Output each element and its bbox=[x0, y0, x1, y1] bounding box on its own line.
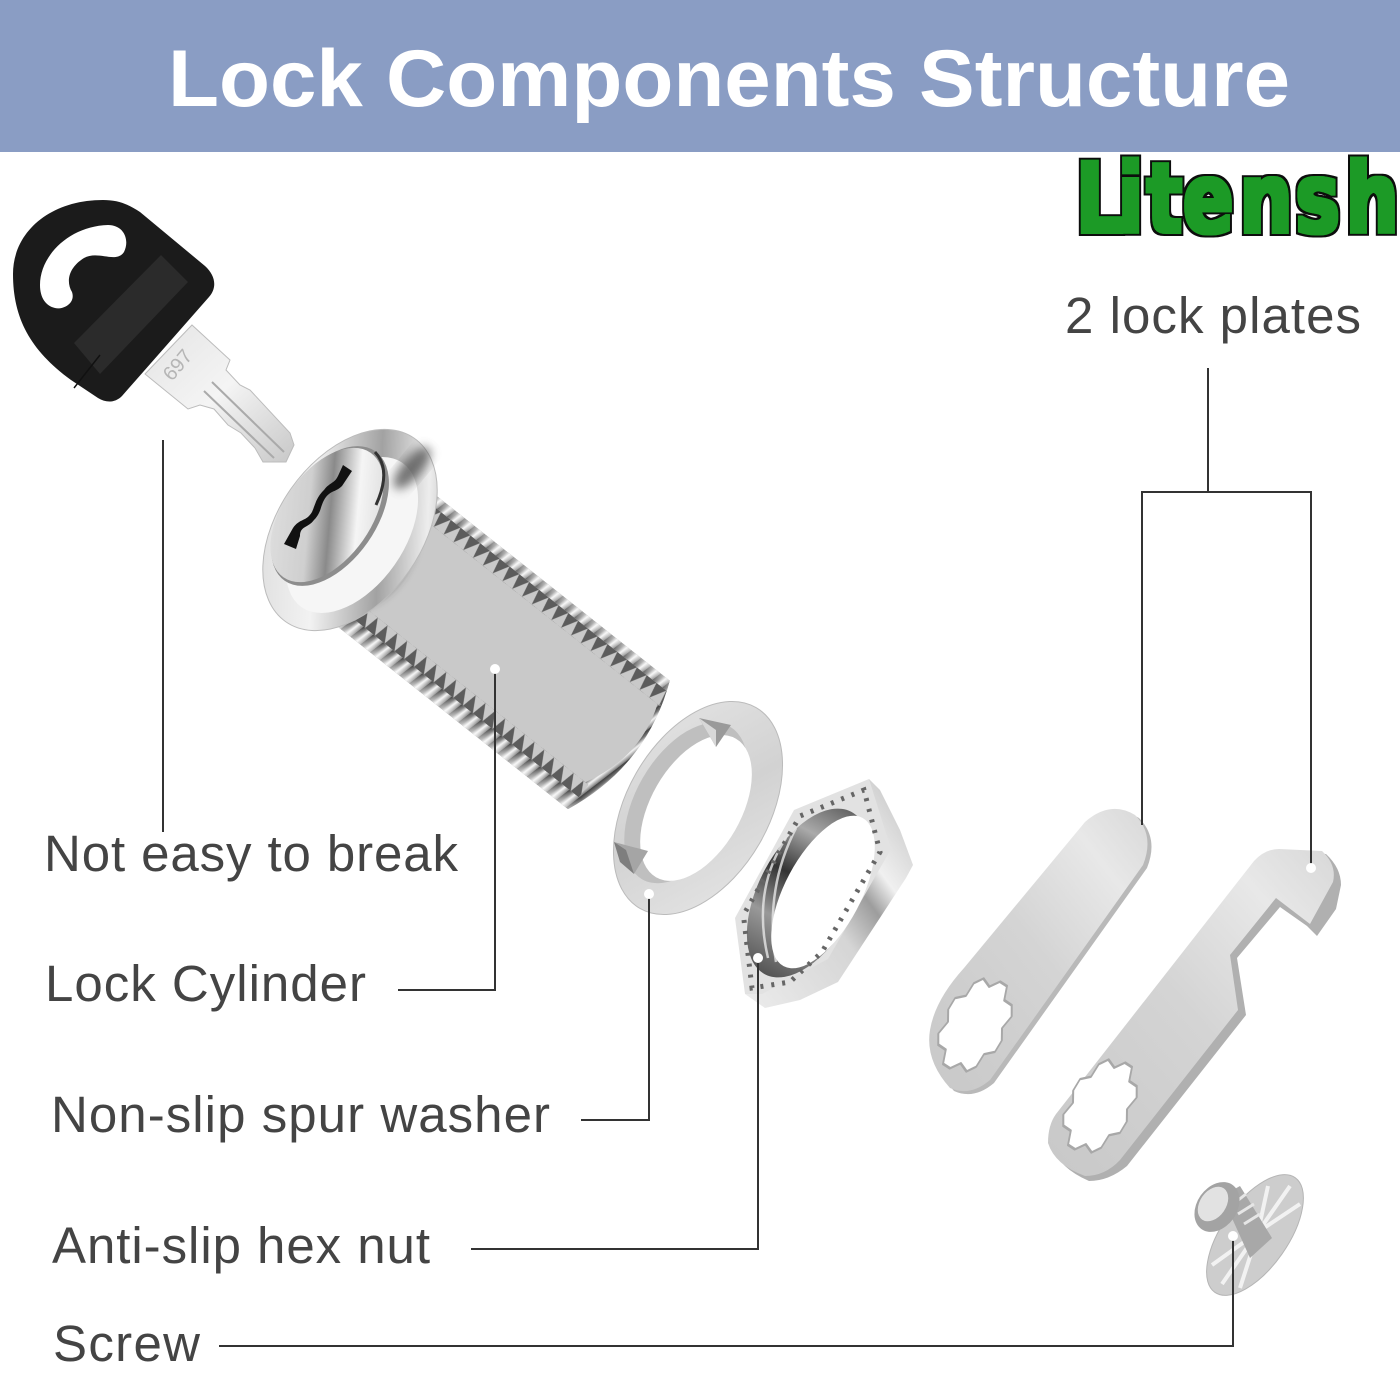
label: cylinder: Lock Cylinder bbox=[45, 955, 366, 1012]
plates bracket leader bbox=[1142, 368, 1316, 873]
screw head bbox=[1185, 1173, 1249, 1241]
icon: screw bbox=[1185, 1159, 1322, 1311]
washer and nut leaders bbox=[471, 889, 763, 1249]
title: Lock Components Structure bbox=[168, 34, 1290, 124]
washer spurs bbox=[614, 718, 731, 874]
icon: hooked lock plate bbox=[1048, 849, 1341, 1181]
brand logo: Litensh bbox=[1076, 144, 1399, 255]
label: nut: Anti-slip hex nut bbox=[52, 1217, 430, 1274]
key blade: 697 bbox=[159, 346, 197, 385]
cylinder head bbox=[227, 397, 473, 663]
nut knurl dots bbox=[744, 790, 880, 988]
screw neck bbox=[1222, 1186, 1272, 1258]
key slot bbox=[284, 465, 352, 549]
icon: hex nut bbox=[722, 779, 913, 1008]
icon: lock cylinder bbox=[262, 428, 670, 809]
screw leader bbox=[219, 1231, 1238, 1346]
nut face bbox=[735, 779, 891, 994]
icon: plain lock plate bbox=[923, 809, 1152, 1094]
nut side wall bbox=[745, 779, 913, 1008]
key bow bbox=[13, 200, 214, 402]
icon: spur washer bbox=[579, 672, 817, 944]
cylinder label dot and leader bbox=[398, 664, 500, 990]
screw flange bbox=[1188, 1159, 1322, 1311]
label: screw: Screw bbox=[53, 1315, 200, 1372]
header banner bbox=[0, 0, 1400, 152]
threaded body bbox=[338, 496, 670, 809]
label: 2 lock plates: 2 lock plates bbox=[1065, 287, 1361, 344]
leader lines bbox=[162, 440, 164, 832]
label: key: Not easy to break bbox=[44, 825, 458, 882]
icon: key bbox=[13, 200, 294, 462]
label: washer: Non-slip spur washer bbox=[51, 1086, 550, 1143]
key blade bbox=[145, 325, 294, 462]
